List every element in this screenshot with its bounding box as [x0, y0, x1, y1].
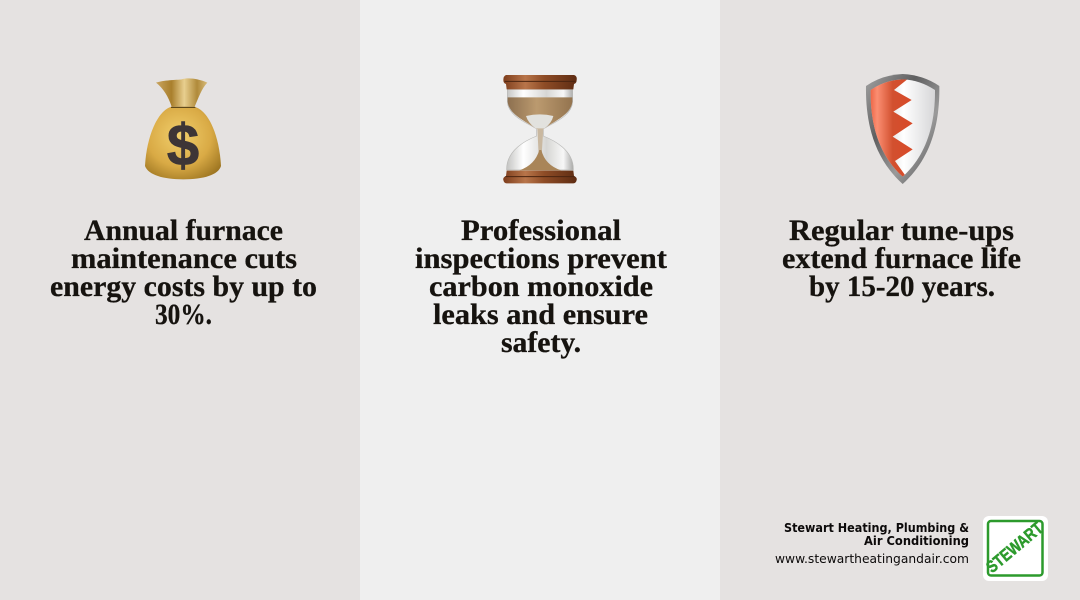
panel: safety background	[360, 0, 720, 600]
heading: energy costs: 30%.	[155, 298, 212, 331]
company name and website: Stewart Heating, Plumbing &	[784, 520, 969, 535]
heading: furnace life: Regular tune-ups	[789, 214, 1014, 247]
panel: energy costs background	[0, 0, 360, 600]
heading: energy costs: Annual furnace	[84, 214, 283, 247]
heading: safety: carbon monoxide	[429, 270, 653, 303]
icon: hourglass	[503, 75, 577, 183]
icon: money bag	[145, 78, 221, 179]
heading: energy costs: maintenance cuts	[71, 242, 297, 275]
icon: Stewart logo: STEWART	[983, 518, 1047, 577]
heading: energy costs	[50, 214, 317, 331]
heading: furnace life	[782, 214, 1021, 303]
heading: safety	[415, 214, 667, 359]
company name and website: www.stewartheatingandair.com	[775, 551, 969, 566]
heading: safety: safety.	[501, 326, 581, 359]
icon: money bag: $	[167, 113, 199, 178]
heading: safety: inspections prevent	[415, 242, 667, 275]
icon: shield	[866, 74, 939, 184]
heading: energy costs: energy costs by up to	[50, 270, 317, 303]
panel: furnace life background	[720, 0, 1080, 600]
heading: furnace life: by 15-20 years.	[809, 270, 995, 303]
heading: furnace life: extend furnace life	[782, 242, 1021, 275]
company name and website: Air Conditioning	[864, 533, 969, 548]
heading: safety: leaks and ensure	[433, 298, 648, 331]
heading: safety: Professional	[461, 214, 621, 247]
company name and website	[775, 520, 969, 566]
